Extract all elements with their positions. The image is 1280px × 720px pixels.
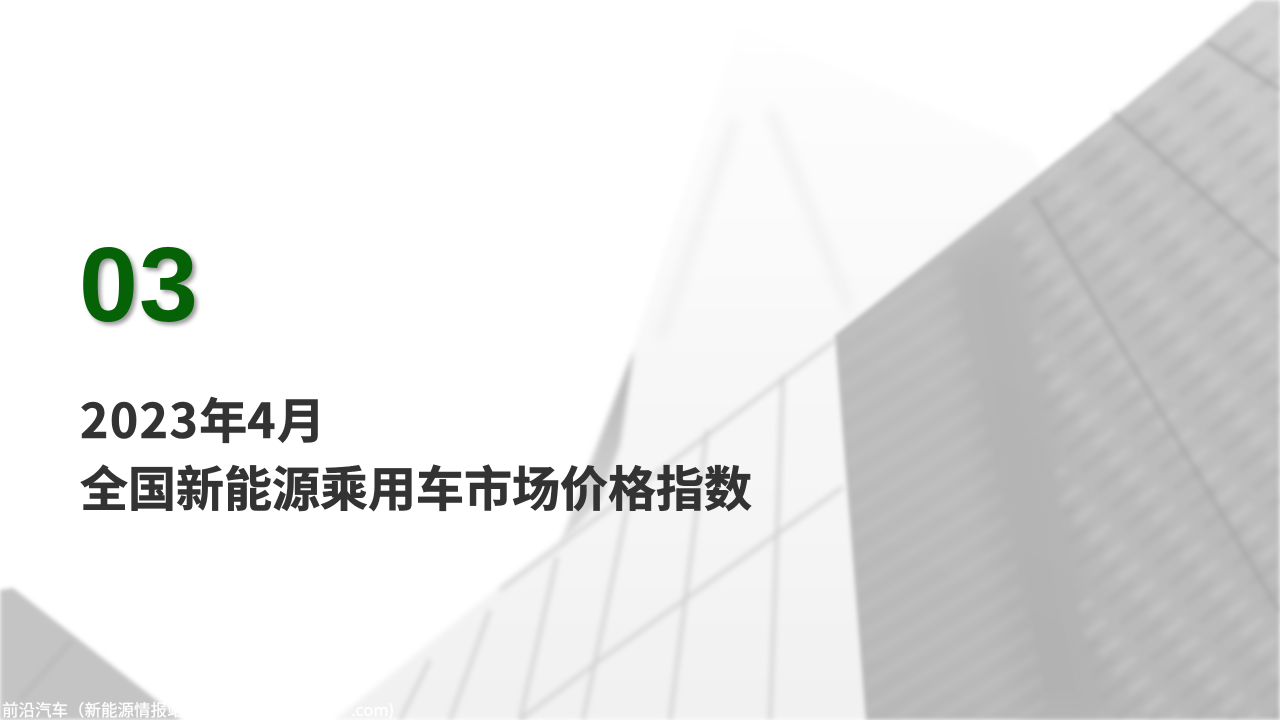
dark tower structural lines [1033, 42, 1280, 612]
glass tower faint vertical ribs [660, 110, 850, 340]
dark tower left face rows [830, 260, 1060, 720]
dark tower window rows [1090, 34, 1280, 632]
dark tower [830, 0, 1280, 720]
section number: 03 [79, 226, 199, 344]
lower-left building [0, 588, 182, 720]
title [80, 382, 752, 520]
watermark [2, 697, 394, 720]
glass tower [335, 25, 1050, 720]
title: 2023年4月 [80, 382, 325, 452]
dark tower shaded column [945, 215, 1110, 720]
title: 全国新能源乘用车市场价格指数 [80, 450, 752, 520]
glass tower window grid [400, 340, 843, 720]
dark sliver between towers [560, 350, 634, 545]
